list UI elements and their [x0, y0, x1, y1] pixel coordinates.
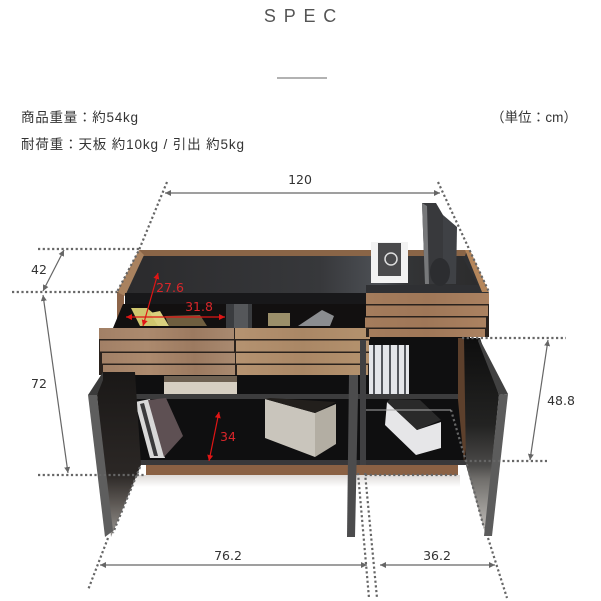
dimension: width 76.2: 76.2	[214, 548, 242, 563]
dimension: width 36.2	[380, 548, 495, 565]
cabinet top surface	[117, 251, 489, 293]
text: load capacity: 耐荷重：天板 約10kg / 引出 約5kg	[21, 137, 244, 152]
wood right rim	[465, 250, 489, 292]
red dimension: shelf height 34: 34	[220, 429, 236, 444]
dimension: depth 42	[31, 250, 64, 291]
right drawer front	[365, 293, 489, 337]
red dimension: drawer depth 27.6	[143, 273, 184, 326]
dimension: height 48.8: 48.8	[547, 393, 575, 408]
magazines	[135, 398, 183, 458]
centre drawer front	[235, 328, 370, 375]
text: product weight: 商品重量：約54kg	[21, 110, 138, 125]
sideboard furniture photo	[88, 203, 508, 537]
thin shelf edge line	[366, 409, 451, 411]
dimension: width 120: 120	[288, 172, 312, 187]
photo frame on top	[371, 242, 408, 283]
dimension: depth 42: 42	[31, 262, 47, 277]
cabinet interior	[120, 337, 470, 465]
dimension: width 36.2: 36.2	[423, 548, 451, 563]
open drawer interior	[113, 304, 366, 328]
left drawer front	[99, 328, 236, 375]
drawer contents: left drawer items	[131, 308, 169, 326]
centre open door	[347, 340, 366, 537]
wood left rim	[117, 250, 144, 296]
text: unit: （単位：cm）	[491, 110, 577, 125]
decorative book boxes on top	[422, 203, 457, 286]
red dimension: drawer width 31.8: 31.8	[185, 299, 213, 314]
bottom shelf	[140, 460, 470, 465]
red dimension: shelf height 34	[209, 412, 236, 461]
shelf board	[135, 394, 470, 399]
title: SPEC	[264, 6, 344, 26]
white books on upper right shelf	[369, 345, 409, 394]
wood base	[146, 465, 458, 475]
left open door	[88, 372, 141, 537]
dimension: height 72: 72	[31, 376, 47, 391]
dotted guide lines	[12, 182, 566, 598]
white box on lower right shelf	[385, 399, 441, 455]
dimension: height 72	[31, 295, 68, 473]
floor shadow	[130, 475, 460, 487]
title underline	[277, 78, 327, 79]
striped box on upper shelf	[164, 376, 237, 394]
wood left side panel	[117, 292, 124, 357]
wood top back rim	[139, 250, 467, 256]
red dimension: drawer depth 27.6: 27.6	[156, 280, 184, 295]
box on lower left shelf	[265, 398, 336, 457]
front lip of top	[125, 293, 366, 304]
dimension: height 48.8	[530, 340, 575, 460]
red dimension: drawer width 31.8	[126, 299, 225, 317]
drawer contents: right drawer items	[268, 313, 290, 326]
right open door	[464, 338, 508, 536]
wood inside of right door	[458, 338, 476, 462]
